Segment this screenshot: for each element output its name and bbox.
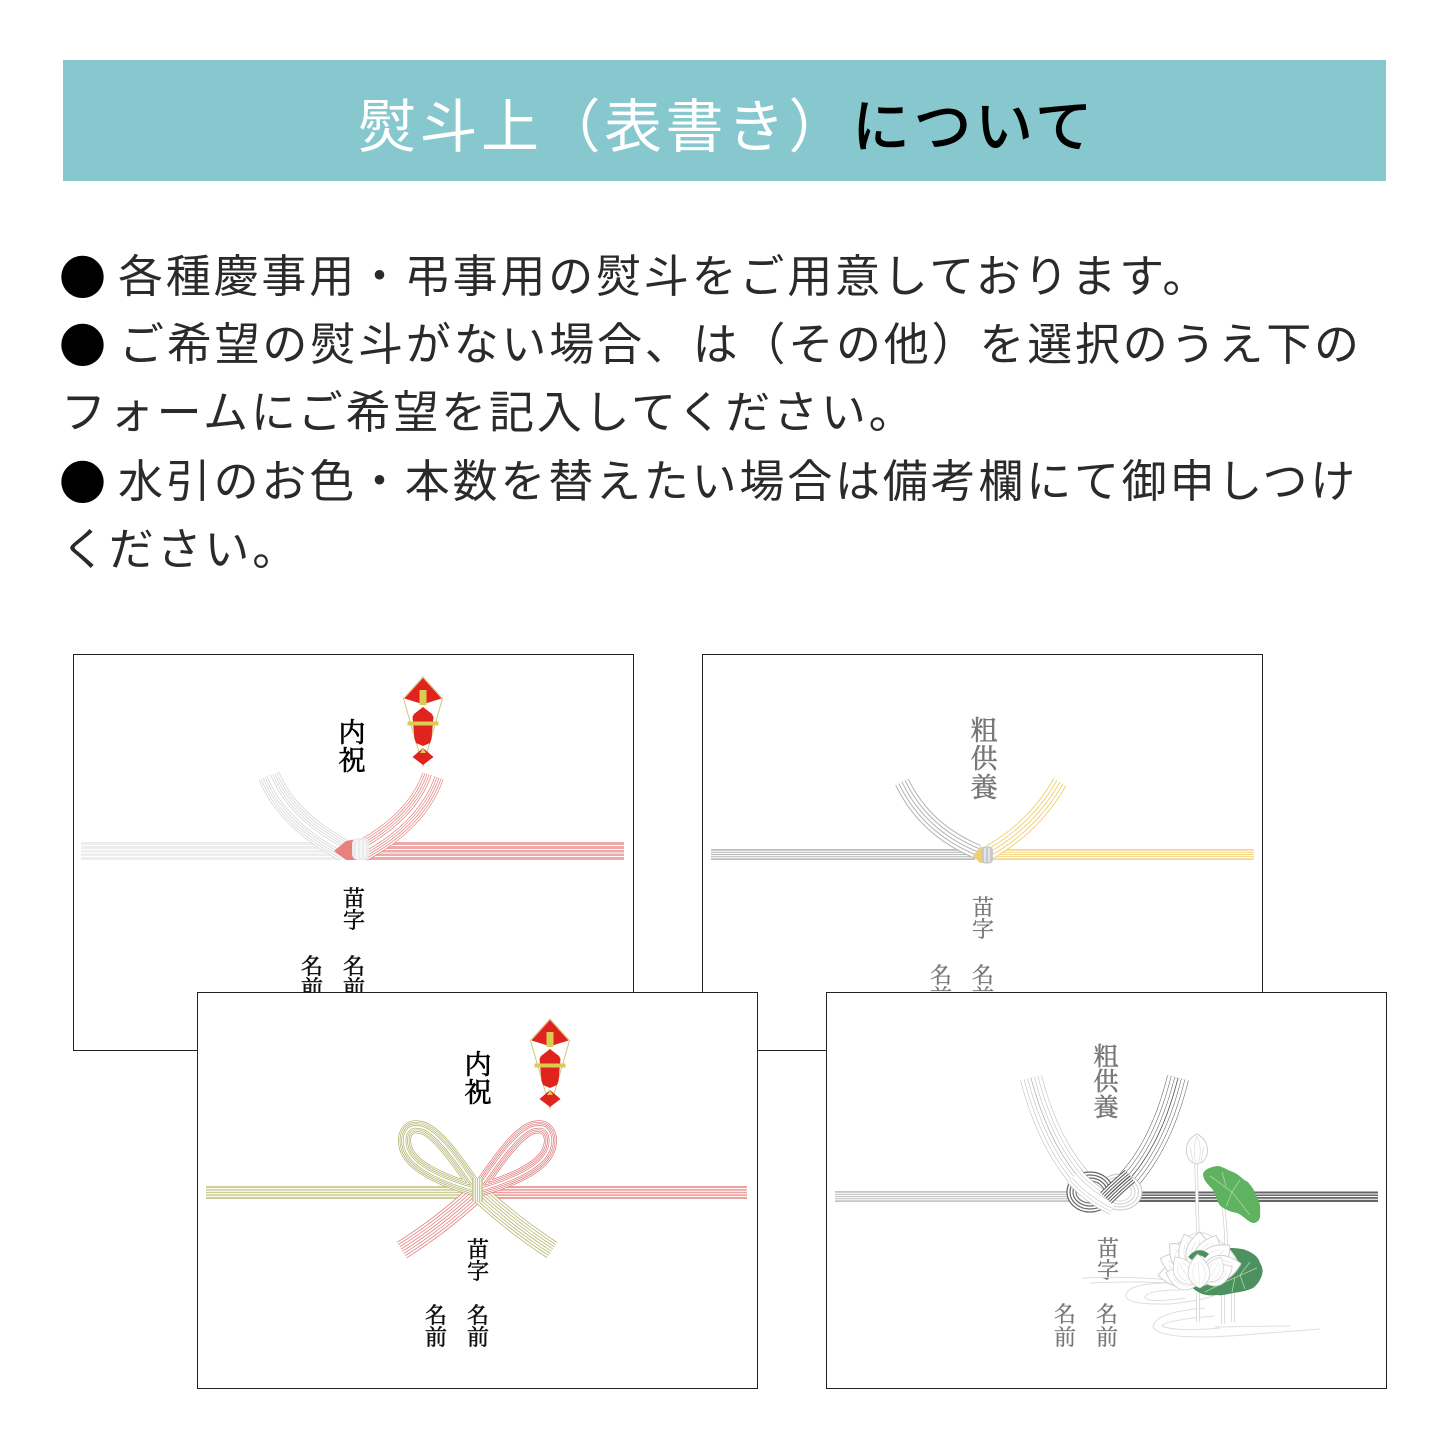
name labels: 名 — [467, 1303, 489, 1328]
name labels: 名 — [1054, 1302, 1076, 1327]
title banner — [63, 60, 1386, 181]
name labels: 字 — [467, 1259, 489, 1284]
heading 粗供養 — [1093, 1043, 1119, 1122]
tail red — [362, 776, 433, 851]
name labels: 名 — [972, 963, 994, 988]
name labels: 前 — [930, 985, 952, 1010]
flower — [1156, 1230, 1244, 1294]
name labels: 前 — [972, 985, 994, 1010]
bullet 3: ● — [59, 445, 106, 514]
tail light — [1031, 1078, 1088, 1187]
horizontal cord grey — [711, 849, 975, 860]
name labels: 前 — [1054, 1325, 1076, 1350]
knot — [334, 838, 369, 860]
illustration: lotus — [1082, 1134, 1320, 1337]
name labels: 苗 — [972, 895, 994, 920]
horizontal cord red — [483, 1186, 747, 1199]
title: black part: について — [852, 95, 1096, 160]
heading 内祝: 内 — [338, 718, 366, 748]
right light ring — [1098, 1174, 1142, 1210]
heading 内祝 — [338, 718, 366, 776]
horizontal cord yellow — [990, 849, 1254, 860]
text line 2: ご希望の熨斗がない場合、は（その他）を選択のうえ下の — [119, 319, 1362, 370]
heading 粗供養: 供 — [970, 744, 998, 774]
name labels: 苗 — [1097, 1236, 1119, 1261]
knot — [973, 846, 993, 864]
name labels: 字 — [972, 917, 994, 942]
tail grey — [902, 782, 978, 852]
dark band crossing — [1106, 1176, 1130, 1198]
title: white part: 熨斗上（表書き） — [358, 95, 850, 160]
card: 粗供養 lotus — [826, 992, 1386, 1388]
bullet 2: ● — [59, 308, 106, 377]
heading 粗供養: 供 — [1093, 1068, 1119, 1096]
text line 3: フォームにご希望を記入してください。 — [61, 387, 916, 438]
heading 粗供養: 粗 — [1093, 1043, 1119, 1071]
card: 内祝 bow knot — [198, 992, 758, 1388]
left dark ring — [1067, 1172, 1113, 1212]
name labels: 名 — [425, 1303, 447, 1328]
card: 粗供養 grey and yellow knot — [702, 654, 1262, 1050]
heading 粗供養: 養 — [970, 773, 998, 803]
water ripples — [1082, 1277, 1320, 1337]
name labels: 前 — [343, 976, 365, 1001]
name labels: 名 — [343, 954, 365, 979]
upper leaf — [1203, 1166, 1260, 1223]
name labels — [930, 895, 994, 1010]
knot: interlocked rings — [1067, 1172, 1142, 1212]
name labels: 前 — [467, 1325, 489, 1350]
text line 1: 各種慶事用・弔事用の熨斗をご用意しております。 — [118, 251, 1210, 302]
lower leaf — [1192, 1248, 1263, 1295]
horizontal cord dark — [1130, 1192, 1378, 1202]
tail yellow — [990, 782, 1060, 852]
heading 粗供養: 養 — [1093, 1094, 1119, 1122]
text line 4: 水引のお色・本数を替えたい場合は備考欄にて御申しつけ — [118, 456, 1358, 507]
name labels: 苗 — [467, 1237, 489, 1262]
name labels: 名 — [1096, 1302, 1118, 1327]
name labels: 名 — [301, 954, 323, 979]
name labels: 前 — [1096, 1325, 1118, 1350]
name labels — [1054, 1236, 1119, 1350]
flower seed pod — [1188, 1250, 1209, 1260]
bullet 1: ● — [59, 240, 106, 309]
loop red — [479, 1127, 550, 1190]
heading 内祝 — [464, 1050, 492, 1108]
tail red lower left — [402, 1195, 474, 1250]
horizontal cord light — [835, 1191, 1070, 1202]
stems — [1196, 1160, 1233, 1324]
tail dark — [1122, 1078, 1178, 1187]
loop olive — [405, 1127, 476, 1190]
knot — [472, 1178, 483, 1202]
name labels: 前 — [425, 1325, 447, 1350]
name labels — [425, 1237, 489, 1350]
text line 5: ください。 — [61, 524, 300, 575]
name labels: 前 — [301, 976, 323, 1001]
horizontal cord white — [81, 842, 343, 860]
horizontal cord olive — [206, 1186, 472, 1199]
icon: noshi — [404, 677, 442, 766]
name labels: 名 — [930, 963, 952, 988]
heading 粗供養 — [970, 716, 998, 803]
bud — [1186, 1134, 1208, 1164]
heading 内祝: 祝 — [464, 1078, 492, 1108]
heading 内祝: 内 — [464, 1050, 492, 1080]
icon: noshi — [530, 1019, 570, 1108]
leaf veins — [1205, 1172, 1257, 1292]
name labels: 苗 — [343, 886, 365, 911]
card: 内祝 red and white knot — [74, 654, 634, 1050]
heading 粗供養: 粗 — [970, 716, 998, 746]
name labels — [301, 886, 365, 1001]
name labels: 字 — [1097, 1258, 1119, 1283]
tail white — [269, 776, 345, 851]
tail olive lower right — [481, 1195, 552, 1250]
heading 内祝: 祝 — [338, 746, 366, 776]
light band crossing — [1074, 1176, 1114, 1206]
horizontal cord red — [365, 842, 624, 860]
name labels: 字 — [343, 908, 365, 933]
